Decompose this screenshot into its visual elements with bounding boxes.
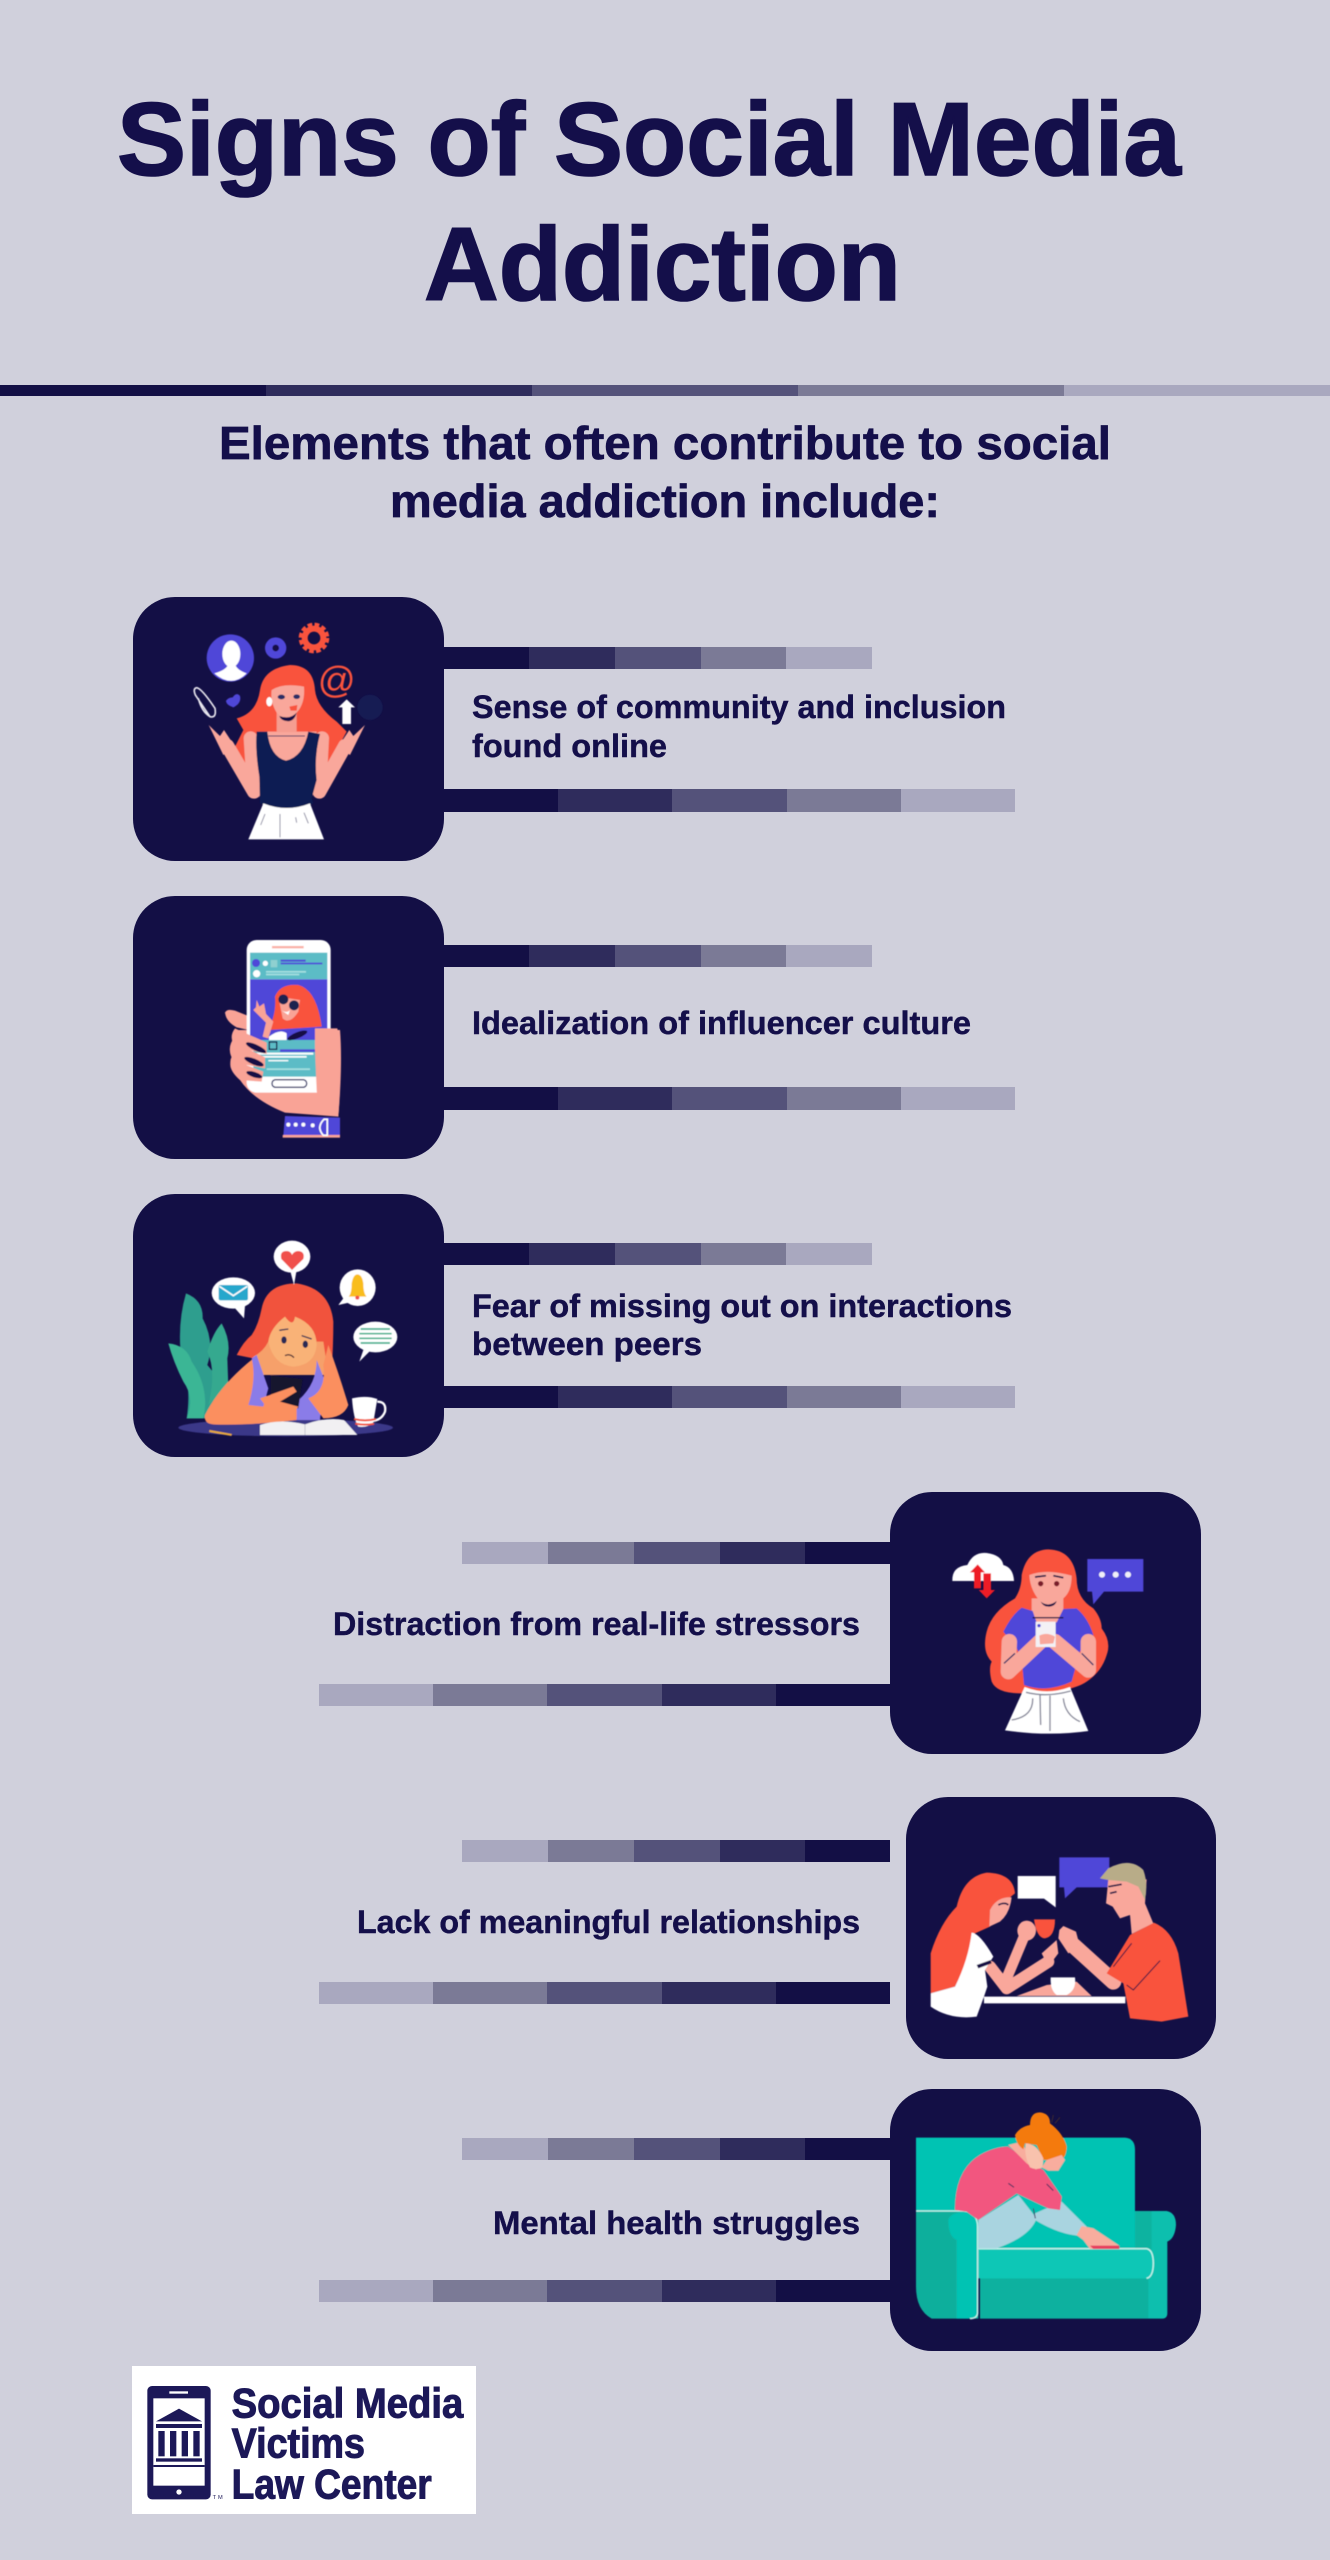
label row 3: between peers: [472, 1326, 702, 1362]
bars row 4: [319, 1542, 890, 1706]
label row 3: [472, 1288, 1012, 1362]
bars row 6: [319, 2138, 890, 2302]
logo wordmark: [213, 2381, 464, 2507]
subtitle: [219, 417, 1111, 527]
bars row 3: [444, 1243, 1015, 1408]
label row 1: Sense of community and inclusion: [472, 689, 1006, 725]
icon card: worried girl with phone: [133, 1194, 444, 1457]
icon card: woman with social icons: @: [318, 659, 356, 701]
bars row 2: [444, 945, 1015, 1110]
label row 6: Mental health struggles: [493, 2205, 860, 2241]
label row 1: found online: [472, 728, 667, 764]
icon card: woman on sofa: [890, 2089, 1201, 2351]
logo: [132, 2366, 476, 2514]
label row 1: [472, 689, 1006, 764]
title: [117, 82, 1182, 323]
panel: influencer culture: [133, 896, 1015, 1159]
panel: sense of community: [133, 597, 1015, 861]
label row 2: Idealization of influencer culture: [472, 1005, 971, 1041]
icon card: couple at table: [906, 1797, 1216, 2059]
bars row 5: [319, 1840, 890, 2004]
bars row 1: [444, 647, 1015, 812]
panel: distraction: [319, 1492, 1201, 1754]
icon card: woman with social icons: [133, 597, 444, 861]
title: Signs of Social Media: [117, 82, 1182, 198]
panel: lack of relationships: [319, 1797, 1216, 2059]
panel: mental health: [319, 2089, 1201, 2351]
panel: fear of missing out: [133, 1194, 1015, 1457]
subtitle: Elements that often contribute to social: [219, 417, 1111, 469]
label row 5: Lack of meaningful relationships: [357, 1904, 860, 1940]
icon: phone with courthouse: [147, 2386, 211, 2499]
label row 4: Distraction from real-life stressors: [333, 1606, 860, 1642]
label row 3: Fear of missing out on interactions: [472, 1288, 1012, 1324]
logo wordmark: TM: [213, 2495, 223, 2501]
icon card: woman with smartphone: [890, 1492, 1201, 1754]
gradient divider rule: [0, 385, 1330, 396]
logo wordmark: Social Media: [232, 2381, 464, 2427]
icon card: hand holding phone: [133, 896, 444, 1159]
logo wordmark: Law Center: [232, 2461, 432, 2507]
logo wordmark: Victims: [232, 2420, 365, 2466]
subtitle: media addiction include:: [390, 475, 940, 527]
title: Addiction: [424, 207, 901, 323]
